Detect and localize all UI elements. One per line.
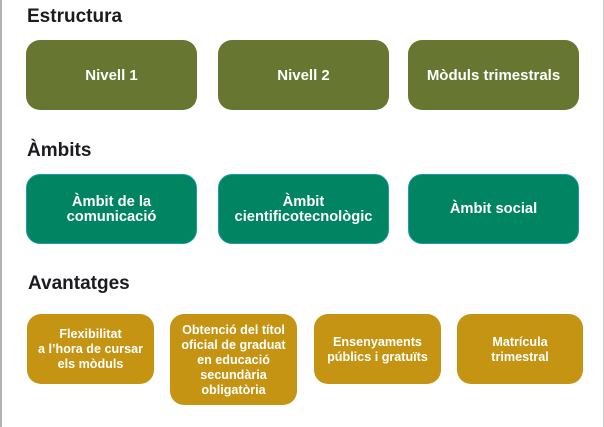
heading: Àmbits: Àmbits	[27, 140, 91, 161]
box: Àmbit cientificotecnològic	[218, 174, 389, 244]
box: Matrícula trimestral	[457, 314, 583, 384]
box: Nivell 1	[26, 40, 197, 110]
box: Matrícula trimestral: Matrícula	[492, 334, 548, 348]
box: Àmbit de la comunicació: comunicació	[67, 208, 156, 224]
box: Àmbit cientificotecnològic: cientificotecnològic	[235, 208, 372, 224]
box: Mòduls trimestrals	[408, 40, 579, 110]
box: Matrícula trimestral: trimestral	[491, 350, 549, 364]
box: Obtenció del títol	[170, 314, 297, 405]
box: Nivell 2	[218, 40, 389, 110]
heading: Estructura: Estructura	[27, 6, 122, 27]
box: Obtenció del títol: en educació	[197, 353, 270, 367]
box: Obtenció del títol: Obtenció del títol	[182, 323, 285, 337]
box: Àmbit de la comunicació: Àmbit de la	[72, 194, 151, 210]
box: Àmbit social: Àmbit social	[450, 201, 537, 217]
box: Flexibilitat: Flexibilitat	[59, 326, 122, 340]
box: Àmbit social	[408, 174, 579, 244]
box: Flexibilitat: els mòduls	[58, 356, 123, 370]
heading: Avantatges: Avantatges	[28, 273, 130, 294]
box: Ensenyaments públics i gratuïts: Ensenyaments	[333, 334, 422, 348]
box: Mòduls trimestrals: Mòduls trimestrals	[427, 66, 560, 84]
box: Obtenció del títol: secundària	[200, 368, 267, 382]
box: Flexibilitat	[27, 314, 154, 384]
box: Àmbit cientificotecnològic: Àmbit	[283, 194, 324, 210]
box: Ensenyaments públics i gratuïts	[314, 314, 441, 384]
box: Nivell 1: Nivell 1	[85, 66, 138, 84]
box: Obtenció del títol: oficial de graduat	[181, 338, 286, 352]
box: Flexibilitat: a l’hora de cursar	[38, 342, 143, 356]
box: Nivell 2: Nivell 2	[277, 66, 330, 84]
box: Obtenció del títol: obligatòria	[201, 383, 266, 397]
box: Ensenyaments públics i gratuïts: públics i gratuïts	[327, 350, 428, 364]
box: Àmbit de la comunicació	[26, 174, 197, 244]
